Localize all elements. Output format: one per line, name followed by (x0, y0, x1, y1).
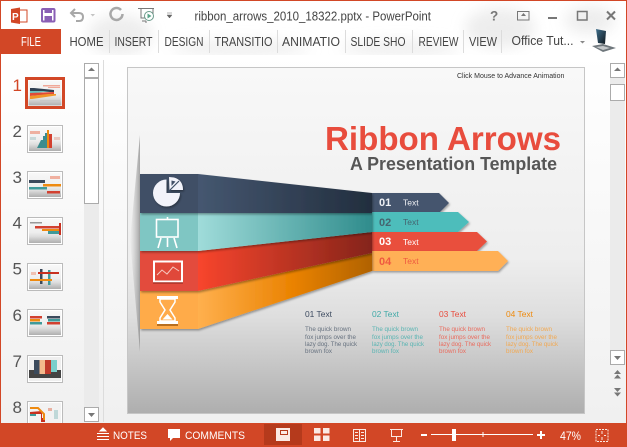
icon: computer (592, 29, 616, 52)
tab labels: INSERT (114, 35, 153, 49)
comments button (168, 429, 245, 442)
right arrow 1 (372, 193, 449, 213)
tab labels (70, 34, 574, 49)
slide numbers: 6 (12, 306, 22, 325)
file tab (1, 29, 61, 54)
icon: PowerPoint: P (12, 12, 19, 23)
ribbon display (518, 12, 529, 20)
right arrow 1: Text (403, 198, 419, 208)
tab labels: ANIMATIO (282, 35, 340, 49)
right arrow 3: Text (403, 237, 419, 247)
thumbnail 4 (28, 218, 62, 244)
slide numbers: 4 (12, 214, 22, 232)
column 1: 01 Text (305, 309, 333, 319)
column 3 (439, 309, 492, 355)
column 2: brown fox (372, 348, 400, 355)
slide numbers: 3 (12, 168, 22, 187)
right arrow 2 (372, 212, 469, 232)
column 2: The quick brown (372, 326, 418, 333)
tab labels: DESIGN (164, 35, 204, 49)
title: Ribbon Arrows (325, 121, 561, 158)
column 1 (305, 309, 358, 355)
tab labels: Office Tut... (512, 34, 574, 48)
right arrow 4: 04 (379, 256, 392, 268)
column 4: The quick brown (506, 326, 552, 333)
thumbnail 2 (28, 126, 62, 152)
column 3: The quick brown (439, 326, 485, 333)
tab labels: VIEW (469, 35, 497, 49)
right arrow 1: 01 (379, 197, 391, 209)
zoom percent: 47% (560, 431, 581, 443)
right arrow 2: Text (403, 217, 419, 227)
column 3: 03 Text (439, 309, 467, 319)
notes button (97, 428, 147, 442)
thumbnail 6 (28, 310, 62, 336)
slide numbers: 2 (12, 122, 22, 141)
tab labels: REVIEW (418, 35, 459, 49)
tab bar (1, 29, 616, 54)
icon: line chart (153, 262, 183, 283)
column 1: lazy dog. The quick (305, 341, 358, 348)
column 4: lazy dog. The quick (506, 341, 559, 348)
icon: customize (167, 13, 172, 18)
right arrow 3 (372, 232, 487, 251)
left edge shadow (130, 135, 140, 352)
thumbnail 3 (28, 172, 62, 198)
column 4: fox jumps over the (506, 334, 557, 341)
ribbon 1 dark (140, 174, 372, 213)
thumbnail 8 (28, 402, 62, 424)
column 4 (506, 309, 559, 355)
slide sorter icon (314, 428, 330, 441)
account dropdown (580, 41, 585, 44)
right arrow 4 (372, 251, 508, 271)
icon: save (42, 9, 54, 22)
column 1: fox jumps over the (305, 334, 356, 341)
panel divider (102, 60, 104, 422)
column 3: brown fox (439, 348, 467, 355)
slide scrollbar (610, 63, 625, 396)
zoom control (421, 429, 545, 441)
slide background (128, 68, 584, 414)
right arrow 3: 03 (379, 236, 391, 248)
title bar watermark (88, 6, 615, 55)
column 2: 02 Text (372, 309, 400, 319)
column 1: The quick brown (305, 326, 351, 333)
thumbnail 1 (26, 78, 64, 108)
column 3: lazy dog. The quick (439, 341, 492, 348)
icon: PowerPoint (11, 8, 27, 24)
column 2: fox jumps over the (372, 334, 423, 341)
notes button: NOTES (113, 430, 147, 442)
ribbon 2 teal (140, 213, 372, 251)
column 1: brown fox (305, 348, 333, 355)
column 2: lazy dog. The quick (372, 341, 425, 348)
quick access toolbar (11, 8, 172, 24)
thumbnail scrollbar (84, 63, 99, 422)
column 4: 04 Text (506, 309, 534, 319)
ribbon 3 red (140, 232, 372, 291)
file tab: FILE (21, 35, 41, 49)
status bar (0, 423, 627, 447)
fit icon (596, 430, 608, 442)
thumbnail 7 (28, 356, 62, 382)
right arrow 4: Text (403, 256, 419, 266)
slide numbers: 5 (12, 260, 22, 278)
tab labels: HOME (70, 35, 104, 49)
minimize (548, 17, 557, 19)
right arrow 2: 02 (379, 217, 391, 229)
icon: redo (111, 8, 122, 20)
slide (128, 68, 584, 414)
close (607, 12, 615, 20)
column 3: fox jumps over the (439, 334, 490, 341)
subtitle: A Presentation Template (350, 154, 557, 174)
window controls (490, 8, 615, 24)
icon: pie chart (153, 177, 183, 206)
icon: slide show (138, 8, 154, 23)
presentation icon (390, 430, 403, 442)
slide thumbnail panel (12, 60, 104, 424)
icon: undo dropdown (90, 14, 95, 16)
column 4: brown fox (506, 348, 534, 355)
comments button: COMMENTS (185, 430, 245, 442)
slide numbers (12, 76, 22, 417)
maximize (578, 12, 587, 20)
thumbnail 5 (28, 264, 62, 290)
reading view icon (354, 430, 366, 442)
slide numbers: 8 (12, 398, 22, 417)
slide numbers: 1 (12, 76, 22, 95)
normal view button (264, 424, 302, 445)
animation note: Click Mouse to Advance Animation (457, 73, 564, 80)
slide numbers: 7 (12, 352, 22, 371)
icon: presentation board (156, 217, 178, 248)
tab labels: SLIDE SHO (350, 35, 406, 49)
document title: ribbon_arrows_2010_18322.pptx - PowerPoint (194, 8, 431, 24)
tab separators (110, 30, 502, 53)
help: ? (490, 8, 498, 24)
tab labels: TRANSITIO (214, 35, 273, 49)
icon: hourglass (157, 296, 178, 325)
column 2 (372, 309, 425, 355)
icon: undo (71, 9, 83, 21)
ribbon 4 orange (140, 253, 372, 329)
